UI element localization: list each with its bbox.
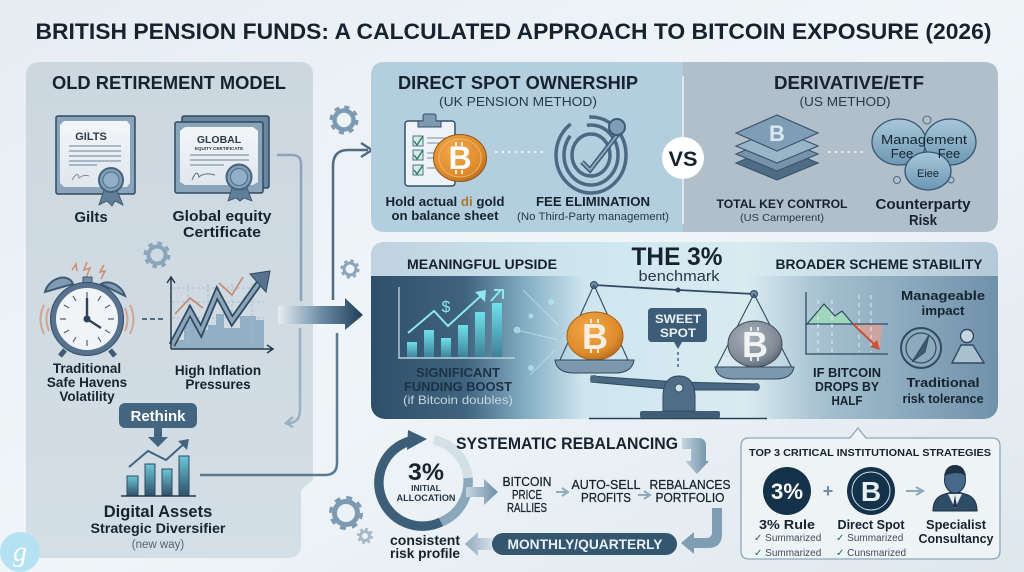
label: hold actual di gold: on balance sheet	[392, 209, 499, 223]
label: if bitcoin drops by half: IF BITCOIN	[813, 366, 881, 380]
label: specialist consultancy: Specialist	[926, 517, 987, 532]
chart: funding upside bars: $	[442, 299, 451, 316]
subheading: us method: (US METHOD)	[800, 94, 890, 109]
heading: top 3 strategies: TOP 3 CRITICAL INSTITUTIONAL STRATEGIES	[749, 447, 991, 459]
label: if bitcoin drops by half	[813, 366, 881, 408]
icon: global equity certificate: GLOBAL	[197, 134, 242, 146]
label: if bitcoin doubles: (if Bitcoin doubles)	[403, 393, 513, 407]
connector: dots	[495, 151, 546, 153]
label: significant funding boost: SIGNIFICANT	[416, 365, 500, 380]
label: consistent risk profile: consistent	[390, 532, 460, 548]
icon: fee bubbles	[872, 116, 976, 190]
label: traditional safe havens volatility: Traditional	[53, 361, 121, 376]
heading: broader scheme stability: BROADER SCHEME STABILITY	[776, 257, 982, 272]
panel: top 3 strategies	[741, 428, 1000, 559]
icon: 3% circle	[763, 467, 811, 515]
icon: global equity certificate	[175, 116, 269, 201]
connector: grey return arrow	[286, 328, 300, 427]
label: manageable impact: impact	[922, 303, 965, 318]
step: bitcoin price rallies: RALLIES	[507, 501, 547, 515]
icon: 3% circle: 3%	[771, 479, 803, 504]
icon: balance scale	[555, 282, 794, 418]
arrow: to specialist	[906, 487, 923, 495]
icon: specialist person	[933, 465, 977, 511]
heading: derivative etf: DERIVATIVE/ETF	[774, 73, 924, 93]
label: consistent risk profile: risk profile	[390, 545, 460, 561]
icon: global equity certificate: EQUITY CERTIFICATE	[195, 146, 243, 151]
label: fee elimination: FEE ELIMINATION	[536, 194, 650, 209]
label: traditional risk tolerance	[902, 375, 984, 406]
plus sign: +	[823, 481, 833, 501]
icon: gears lower	[330, 498, 372, 543]
icon: gauge	[901, 328, 941, 368]
section: systematic rebalancing	[379, 430, 730, 561]
chart: bitcoin drop	[806, 292, 888, 354]
icon: gear upper	[331, 107, 357, 133]
logo badge: g	[13, 537, 27, 568]
icon: key and target	[556, 117, 626, 193]
label: global equity certificate: Global equity	[172, 208, 272, 225]
panel: old retirement model	[26, 62, 313, 558]
label: if bitcoin drops by half: HALF	[832, 394, 863, 408]
arrow: portfolio to monthly	[681, 508, 722, 554]
arrow: step two to three	[638, 491, 650, 499]
label: digital assets: Digital Assets	[104, 503, 212, 521]
icon: gilts certificate	[56, 116, 135, 206]
heading: systematic rebalancing: SYSTEMATIC REBALANCING	[456, 434, 678, 453]
arrow: monthly to risk profile	[465, 532, 492, 556]
connector: grey line from certificates	[277, 155, 301, 301]
icon: circular arrow	[379, 430, 468, 526]
checklist: 3% rule: ✓ Summarized	[754, 548, 821, 559]
label: no third-party management: (No Third-Party management)	[517, 211, 669, 223]
label: significant funding boost: FUNDING BOOST	[404, 379, 512, 394]
label: counterparty risk: Risk	[909, 213, 938, 229]
checklist: direct spot: ✓ Cunsmarized	[836, 548, 906, 559]
step: auto-sell profits	[572, 478, 641, 505]
callout: sweet spot: SWEET	[655, 312, 702, 326]
panel: ownership comparison	[371, 62, 998, 232]
icon: layered stack	[736, 115, 818, 180]
label: counterparty risk	[876, 197, 970, 229]
chart: digital assets bars	[121, 439, 196, 496]
label: specialist consultancy	[918, 517, 994, 546]
label: traditional safe havens volatility: Safe Havens	[47, 375, 127, 390]
step: auto-sell profits: PROFITS	[581, 491, 631, 505]
checklist: 3% rule: ✓ Summarized	[754, 533, 821, 544]
label: if bitcoin drops by half: DROPS BY	[815, 380, 880, 394]
glow rays	[514, 290, 558, 375]
step: rebalances portfolio: PORTFOLIO	[656, 491, 725, 505]
label: total key control: TOTAL KEY CONTROL	[716, 197, 848, 211]
connector: dark line to direct ownership	[333, 143, 372, 300]
icon: fee bubbles: Eiee	[917, 168, 939, 180]
icon: small gear	[145, 243, 169, 267]
pill: monthly quarterly: MONTHLY/QUARTERLY	[508, 536, 663, 552]
step: rebalances portfolio: REBALANCES	[650, 478, 730, 492]
label: hold actual di gold	[386, 195, 504, 223]
icon: alarm clock	[40, 262, 134, 356]
label: manageable impact	[901, 288, 985, 318]
label: global equity certificate: Certificate	[183, 224, 261, 241]
label: global equity certificate	[172, 208, 272, 241]
label: allocation: ALLOCATION	[396, 493, 456, 503]
icon: fee bubbles: Fee	[938, 146, 960, 161]
panel: 3% benchmark	[371, 242, 998, 419]
callout: sweet spot	[648, 308, 707, 370]
heading: direct spot ownership: DIRECT SPOT OWNERSHIP	[398, 73, 638, 93]
label: significant funding boost	[404, 365, 512, 394]
step: bitcoin price rallies	[502, 475, 552, 515]
icon: clipboard with bitcoin	[405, 114, 486, 186]
vs badge: VS	[668, 148, 698, 171]
chart: funding upside bars	[399, 287, 515, 358]
step: auto-sell profits: AUTO-SELL	[572, 478, 641, 492]
rethink badge	[119, 403, 197, 447]
big arrow	[278, 298, 363, 330]
step: bitcoin price rallies: BITCOIN	[502, 475, 552, 489]
heading: the 3%: THE 3%	[632, 243, 722, 271]
label: consistent risk profile	[390, 532, 460, 561]
arrow: heading to rebalances	[682, 438, 709, 474]
label: high inflation pressures: Pressures	[185, 377, 251, 392]
label: initial: INITIAL	[411, 483, 441, 493]
rethink badge: Rethink	[130, 408, 186, 425]
label: us carmperent: (US Carmperent)	[740, 212, 824, 224]
arrow: to bitcoin rallies	[466, 479, 498, 505]
label: direct spot: Direct Spot	[838, 517, 905, 532]
icon: balance scale: B	[742, 324, 768, 365]
label: 3%: 3%	[408, 459, 444, 486]
pill: monthly quarterly	[492, 533, 677, 555]
icon: layered stack: B	[769, 121, 785, 146]
connector: dots	[828, 151, 866, 153]
label: traditional safe havens volatility: Volatility	[59, 389, 115, 404]
icon: balance scale: B	[582, 316, 608, 357]
label: gilts: Gilts	[74, 209, 108, 226]
vs badge	[662, 137, 704, 179]
logo badge	[0, 532, 40, 572]
icon: gear middle	[342, 260, 358, 278]
label: hold actual di gold: Hold actual di gold	[386, 195, 504, 209]
subheading: uk pension method: (UK PENSION METHOD)	[439, 94, 597, 109]
arrow: step one to two	[556, 488, 568, 496]
heading: old retirement model: OLD RETIREMENT MODEL	[52, 72, 286, 93]
chart: high inflation pressures	[167, 271, 273, 353]
heading: meaningful upside: MEANINGFUL UPSIDE	[407, 257, 557, 272]
icon: bitcoin circle: B	[861, 476, 881, 507]
icon: person	[952, 330, 984, 363]
connector: digital assets to arrow	[200, 333, 337, 475]
label: high inflation pressures: High Inflation	[175, 363, 261, 378]
icon: fee bubbles: Fee	[891, 146, 913, 161]
icon: gilts certificate: GILTS	[75, 131, 107, 143]
step: bitcoin price rallies: PRICE	[512, 488, 542, 502]
label: traditional risk tolerance: risk tolerance	[902, 391, 984, 406]
callout: sweet spot: SPOT	[660, 326, 697, 340]
label: 3% rule: 3% Rule	[759, 517, 815, 532]
connector: dashes clock to chart	[142, 318, 163, 320]
step: rebalances portfolio	[650, 478, 730, 505]
label: strategic diversifier: Strategic Diversifier	[90, 521, 226, 536]
icon: bitcoin circle	[847, 467, 895, 515]
icon: fee bubbles: Management	[881, 132, 967, 147]
label: manageable impact: Manageable	[901, 288, 985, 303]
label: specialist consultancy: Consultancy	[918, 531, 994, 546]
label: new way: (new way)	[132, 539, 184, 551]
checklist: direct spot: ✓ Summarized	[836, 533, 903, 544]
icon: clipboard with bitcoin: B	[448, 140, 472, 176]
label: benchmark: benchmark	[638, 268, 720, 285]
title: BRITISH PENSION FUNDS: A CALCULATED APPROACH TO BITCOIN EXPOSURE (2026)	[36, 19, 992, 44]
label: traditional risk tolerance: Traditional	[906, 375, 980, 390]
label: counterparty risk: Counterparty	[876, 197, 970, 213]
